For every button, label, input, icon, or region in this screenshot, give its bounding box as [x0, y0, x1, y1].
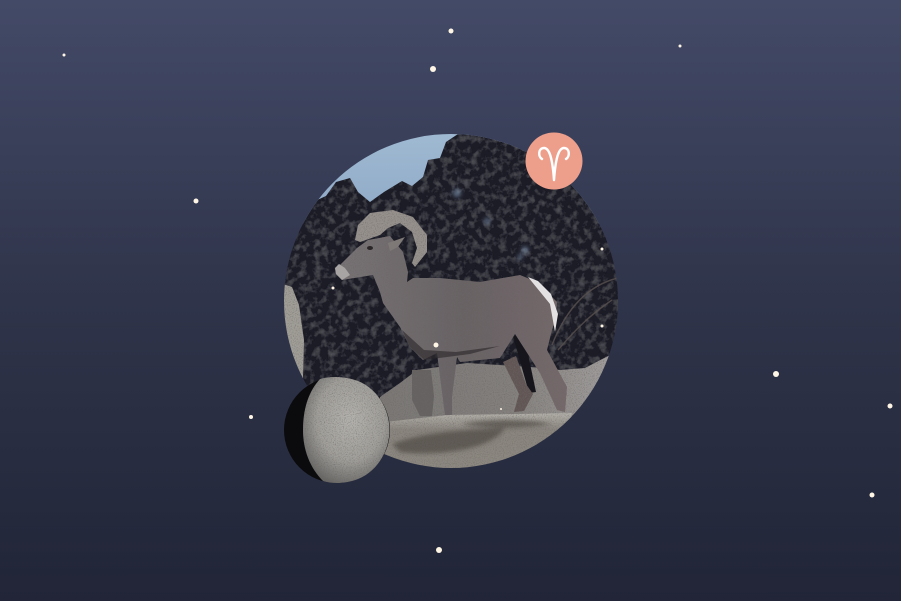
muzzle: [335, 264, 350, 280]
curled horn: [355, 210, 427, 267]
background boulder: [380, 356, 609, 430]
ledge dark streaks: [392, 420, 552, 453]
dark trees: [284, 134, 620, 470]
ram: [335, 210, 567, 416]
body, neck and head: [335, 236, 567, 415]
planet Mercury: [284, 377, 390, 483]
belly shading: [402, 330, 500, 360]
sky: [302, 134, 600, 224]
light rock at left edge: [284, 284, 304, 378]
planet lit side: [303, 377, 390, 483]
far hind leg: [503, 356, 533, 412]
far hind leg shadow: [513, 335, 536, 393]
bare branches on the right: [552, 278, 618, 350]
photo disc: bighorn ram on rocks: [280, 134, 620, 480]
far front legs: [412, 370, 434, 416]
ear: [388, 237, 405, 251]
white rump patch: [528, 277, 558, 332]
eye: [367, 246, 373, 250]
rock ledge: [384, 413, 572, 468]
planet shadow: [284, 377, 390, 483]
sky gaps in the trees: [453, 189, 528, 260]
icon: Aries zodiac badge: [526, 132, 582, 190]
